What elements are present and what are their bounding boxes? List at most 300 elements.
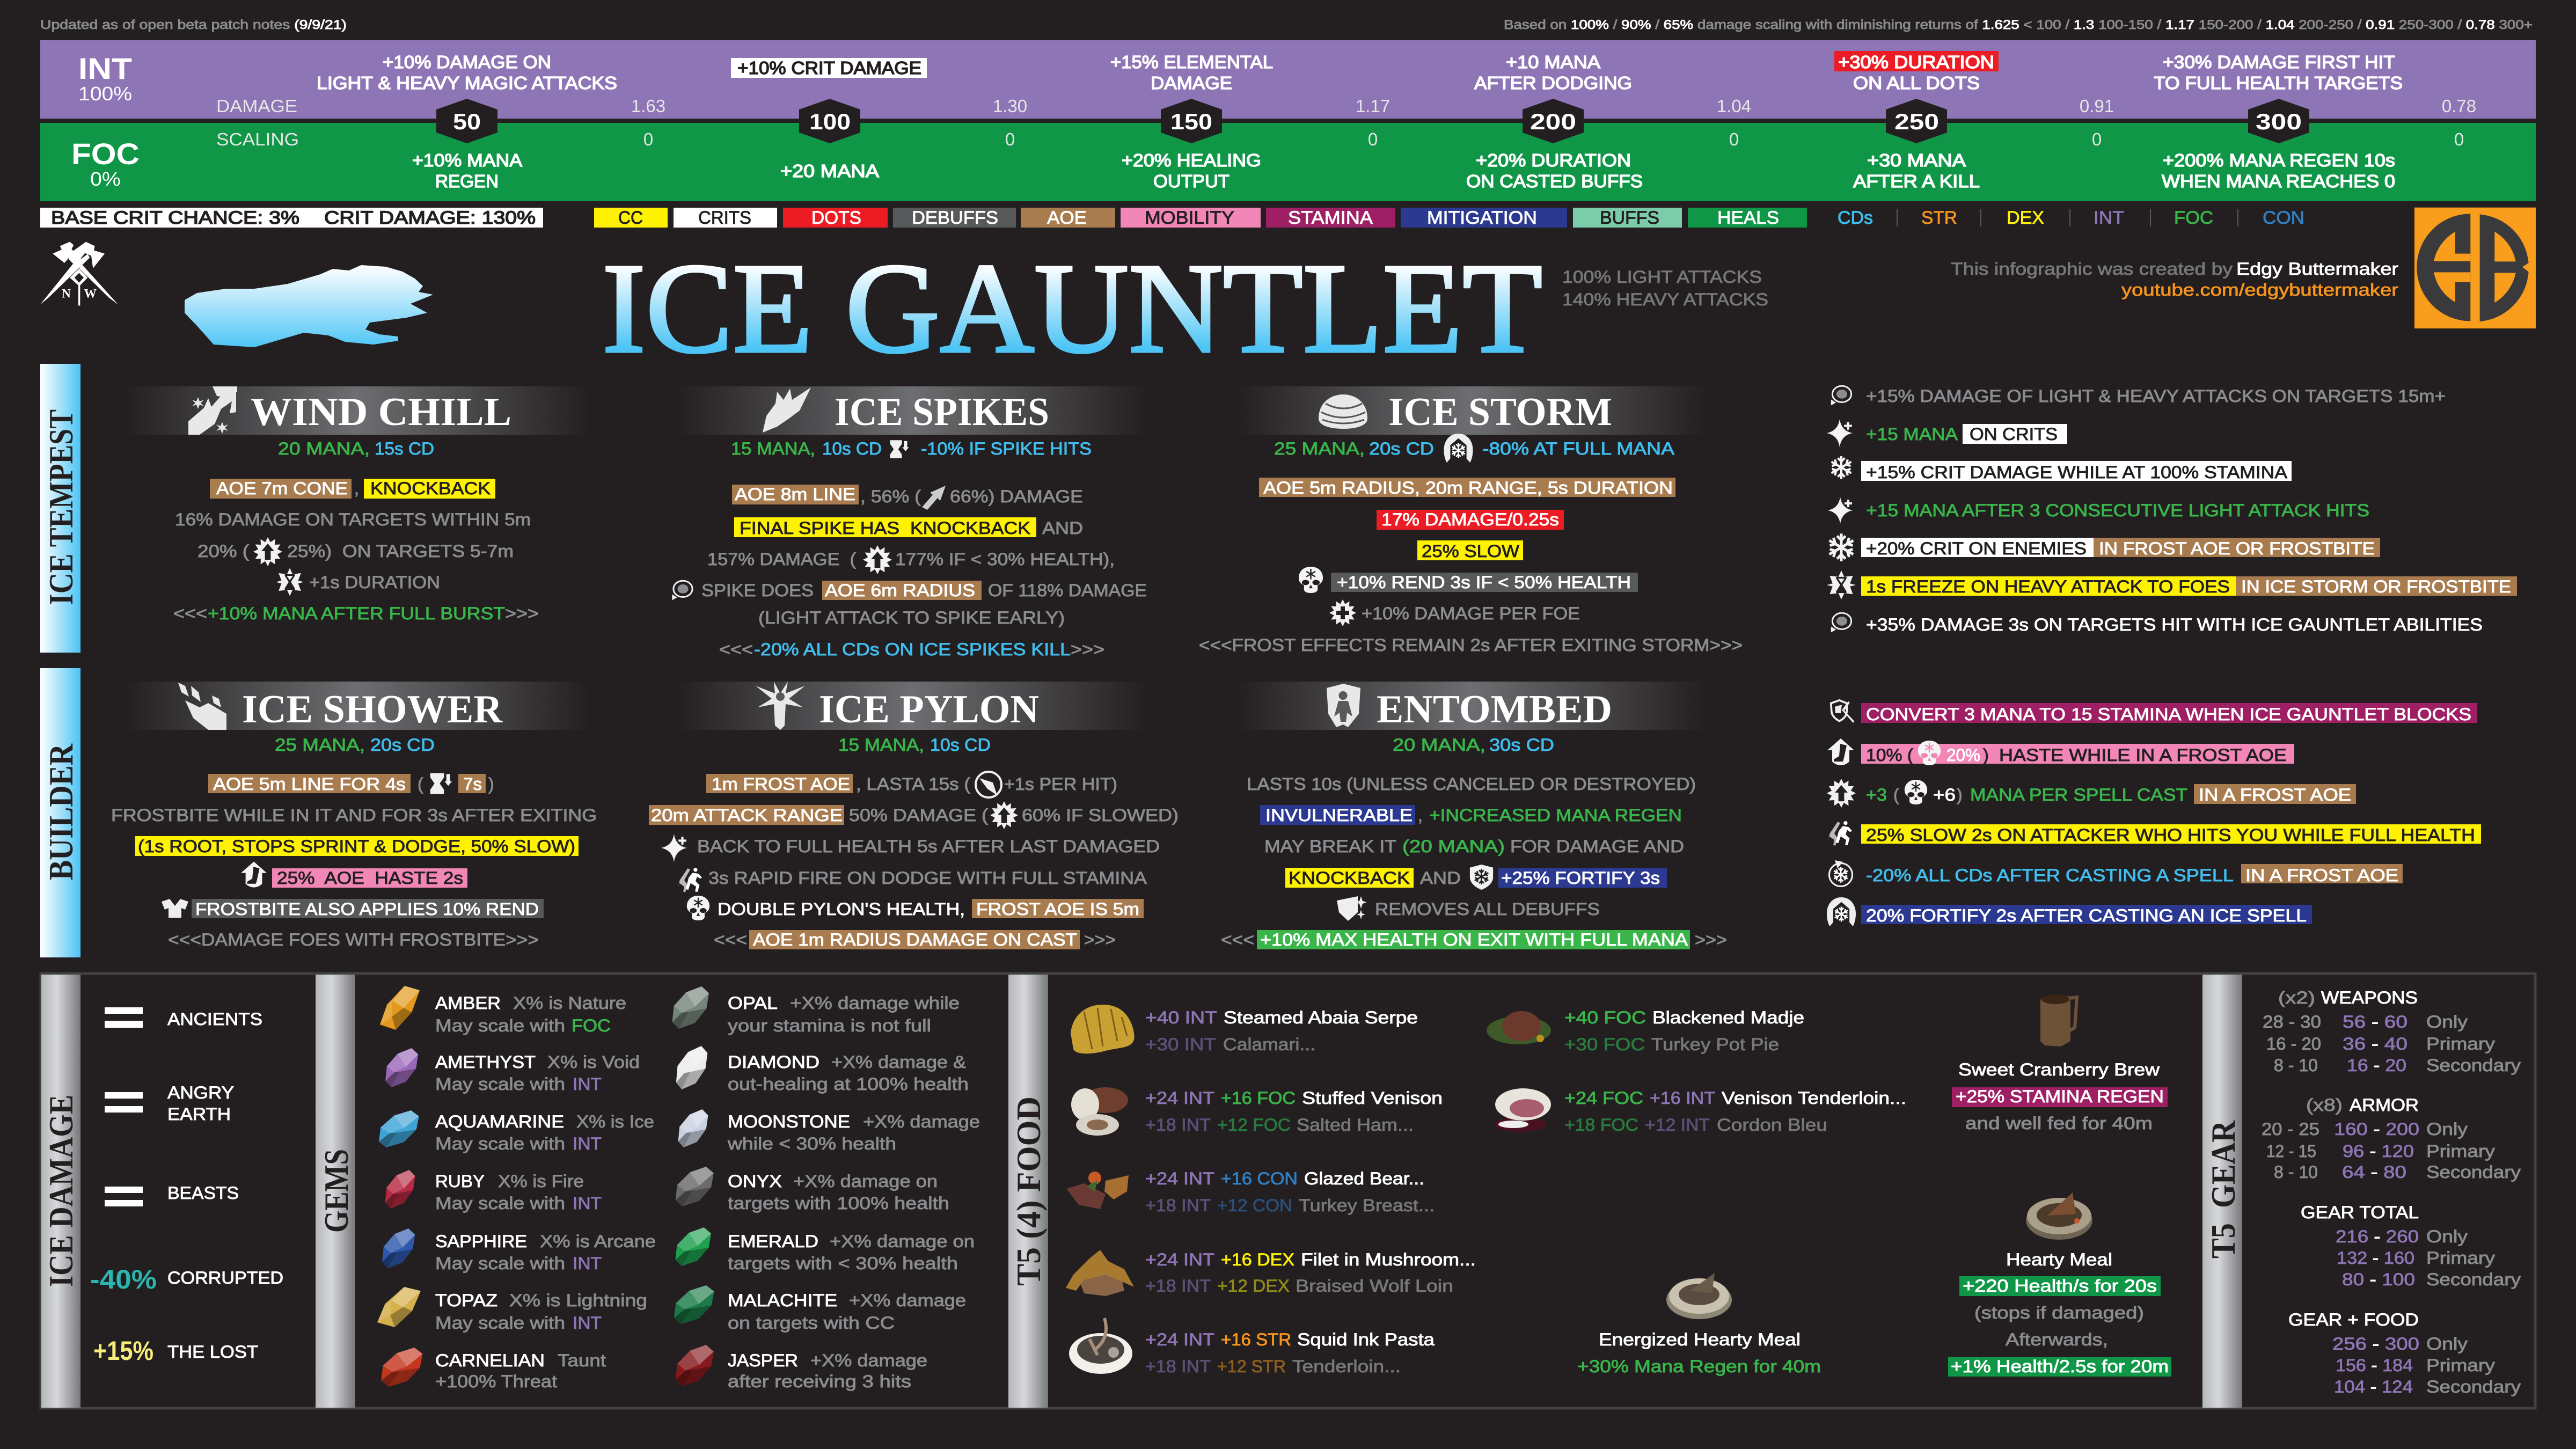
gem: emerald: targets with < 30% health <box>728 1254 958 1273</box>
effect: aoe and knockback: AOE 7m CONE <box>216 479 348 498</box>
effect: double health: FROST AOE IS 5m <box>976 899 1139 919</box>
legend: buffs <box>1573 208 1682 228</box>
effect: spike aoe: AOE 6m RADIUS <box>825 581 975 600</box>
effect: aoe line: 66%) DAMAGE <box>950 487 1083 506</box>
gem: amethyst <box>385 1048 640 1094</box>
gem: ruby: X% is Fire <box>498 1172 584 1191</box>
food: glazed bear: +24 INT <box>1145 1169 1214 1188</box>
cost: -10% IF SPIKE HITS <box>921 439 1092 458</box>
legend: attribute colours: CDs <box>1838 208 1873 228</box>
food: filet in mushroom: Braised Wolf Loin <box>1296 1276 1453 1296</box>
effect: dot: 17% DAMAGE/0.25s <box>1381 510 1559 529</box>
effect: break: FOR DAMAGE AND <box>1510 837 1684 856</box>
FOC label: 0% <box>90 168 121 190</box>
effect: aoe <box>208 773 494 794</box>
separator strip <box>40 119 2536 123</box>
base crit chip: CRIT DAMAGE: 130% <box>324 208 536 228</box>
gear: weapons: 16 - 20 <box>2266 1034 2321 1053</box>
effect: far damage: 25%) ON TARGETS 5-7m <box>287 541 514 561</box>
effect: slow: 25% SLOW <box>1422 541 1520 561</box>
row: corrupted: CORRUPTED <box>167 1268 283 1287</box>
passive: crit damage <box>1832 456 2292 482</box>
passive: damage after abilities: +35% DAMAGE 3s ON TARGETS HIT WITH ICE GAUNTLET ABILITIES <box>1866 615 2483 634</box>
food: glazed bear: +18 INT <box>1145 1196 1211 1215</box>
food: venison tenderloin: +18 FOC <box>1564 1115 1638 1135</box>
gem: aquamarine: INT <box>573 1134 602 1153</box>
gear: armor: Secondary <box>2426 1162 2521 1182</box>
damage scaling labels: DAMAGE <box>216 96 297 116</box>
effect: knockback and fortify <box>1285 865 1667 890</box>
gear: gear plus food <box>2288 1310 2521 1396</box>
passive: fortify <box>1827 897 2312 926</box>
icon: ice shower <box>178 683 226 730</box>
food: filet in mushroom: +12 DEX <box>1217 1276 1290 1296</box>
effect: haste <box>241 862 467 888</box>
gem: emerald: +X% damage on <box>830 1232 975 1251</box>
panel: ice damage <box>41 975 283 1408</box>
effect: damage per foe: +10% DAMAGE PER FOE <box>1362 604 1580 623</box>
effect: knockback and fortify: KNOCKBACK <box>1289 868 1410 888</box>
side tab: builder: BUILDER <box>42 743 80 880</box>
gear: gear plus food: GEAR + FOOD <box>2288 1310 2419 1329</box>
heading: entombed <box>1235 682 1707 731</box>
ultimate line: >>> <box>1084 930 1116 949</box>
side tab: ice damage <box>41 975 80 1408</box>
effect: invulnerable <box>1260 805 1682 825</box>
effect: aoe: AOE 5m LINE FOR 4s <box>213 774 406 794</box>
food: hearty meal: Afterwards, <box>2006 1330 2108 1349</box>
panel: ice pylon <box>649 682 1179 949</box>
gem: amber: AMBER <box>435 993 501 1013</box>
ultimate line: <<<FROST EFFECTS REMAIN 2s AFTER EXITING STORM>>> <box>1199 635 1743 655</box>
gear: gear plus food: Primary <box>2426 1356 2495 1375</box>
gear: armor: 8 - 10 <box>2274 1162 2318 1182</box>
effect: knockback and fortify: AND <box>1420 868 1461 888</box>
passive: crit in frost <box>1829 533 2380 561</box>
gear: total: GEAR TOTAL <box>2301 1203 2419 1222</box>
effect: frost aoe <box>706 772 1117 797</box>
cost: 20s CD <box>1369 439 1434 458</box>
legend: attribute colours: STR <box>1921 208 1957 228</box>
FOC bonus 50 <box>412 150 522 191</box>
gear: gear plus food: 156 - 184 <box>2336 1356 2413 1375</box>
passive: ranged damage: +15% DAMAGE OF LIGHT & HEAVY ATTACKS ON TARGETS 15m+ <box>1866 386 2446 406</box>
INT bonus 150: DAMAGE <box>1151 73 1232 93</box>
passive: haste in frost: 20% <box>1946 745 1980 765</box>
panel: bottom reference frame <box>41 974 2535 1408</box>
icon: ice gauntlet silhouette <box>185 265 433 347</box>
gear: total <box>2301 1203 2521 1289</box>
cost <box>838 735 991 755</box>
milestone 50 <box>436 99 497 143</box>
row: the lost <box>93 1336 258 1366</box>
gem: topaz: May scale with <box>435 1313 565 1333</box>
panel: attribute scaling bands <box>40 40 2536 201</box>
passive: freeze <box>1827 570 2517 599</box>
effect: low health damage <box>707 545 1115 574</box>
row: angry earth <box>105 1083 234 1124</box>
passive: mana per spell: ) <box>1957 785 1963 804</box>
food: squid ink pasta: +24 INT <box>1145 1330 1214 1349</box>
gem: amber: May scale with <box>435 1016 565 1035</box>
gem: sapphire: SAPPHIRE <box>435 1232 527 1251</box>
effect: break: (20 MANA) <box>1402 837 1505 856</box>
title: ICE GAUNTLET <box>602 237 1542 379</box>
damage scaling numbers: 0 <box>1368 129 1378 149</box>
row: ancients <box>105 1007 262 1029</box>
effect: health regen: BACK TO FULL HEALTH 5s AFTER LAST DAMAGED <box>697 837 1160 856</box>
food: stuffed venison: +16 FOC <box>1221 1088 1296 1108</box>
row: angry earth: ANGRY <box>167 1083 234 1102</box>
ultimate line: <<< <box>1221 930 1254 949</box>
heading: ice storm: ICE STORM <box>1388 390 1612 434</box>
effect: aoe: AOE 5m RADIUS, 20m RANGE, 5s DURATION <box>1263 478 1673 497</box>
panel: wind chill <box>123 386 591 623</box>
milestone 200 <box>1523 99 1584 143</box>
side tab: gems: GEMS <box>317 1149 355 1233</box>
FOC bonus 200 <box>1466 150 1643 191</box>
gem: carnelian: CARNELIAN <box>435 1351 545 1370</box>
effect: removes debuffs: REMOVES ALL DEBUFFS <box>1375 899 1600 919</box>
cost: -80% AT FULL MANA <box>1482 439 1675 458</box>
gem: sapphire: May scale with <box>435 1254 565 1273</box>
gem: malachite: MALACHITE <box>728 1291 837 1310</box>
effect: aoe and knockback: , <box>354 479 359 498</box>
effect: final spike: AND <box>1042 518 1083 538</box>
food: hearty meal: Hearty Meal <box>2006 1250 2112 1269</box>
food: energized hearty meal: +30% Mana Regen for 40m <box>1577 1357 1821 1376</box>
damage scaling numbers: 1.63 <box>631 96 665 116</box>
food: filet in mushroom <box>1066 1250 1476 1296</box>
passive: haste in frost: 10% ( <box>1866 745 1913 765</box>
food: hearty meal: +220 Health/s for 20s <box>1963 1276 2157 1296</box>
milestone 250: 250 <box>1894 109 1939 134</box>
cost: 20 MANA, <box>278 439 370 458</box>
row: ancients: ANCIENTS <box>167 1009 262 1029</box>
cost <box>275 735 435 755</box>
effect: health regen <box>661 834 1160 862</box>
gem: diamond: out-healing at 100% health <box>728 1074 969 1094</box>
milestone 200: 200 <box>1530 109 1576 134</box>
panel: builder passives <box>1827 700 2481 926</box>
icon: wind chill <box>188 386 237 435</box>
passive: haste in frost <box>1827 738 2294 765</box>
passive: cooldown reduction <box>1829 860 2403 887</box>
food: stuffed venison <box>1071 1087 1443 1136</box>
food: sweet cranberry brew: +25% STAMINA REGEN <box>1956 1087 2164 1106</box>
panel: ice storm <box>1199 386 1743 655</box>
heading: wind chill: WIND CHILL <box>251 390 511 434</box>
effect: attack range: 50% DAMAGE ( <box>849 806 988 825</box>
gem: amber <box>380 986 626 1035</box>
INT bonus 300 <box>2154 52 2403 93</box>
gem: onyx: targets with 100% health <box>728 1194 949 1213</box>
INT bonus 250: ON ALL DOTS <box>1853 73 1980 93</box>
gem: topaz: X% is Lightning <box>509 1291 647 1310</box>
effect: aoe: ( <box>418 774 423 794</box>
damage scaling numbers: 0 <box>2092 129 2102 149</box>
food: venison tenderloin: +12 INT <box>1645 1115 1710 1135</box>
icon: ice spikes <box>763 387 811 433</box>
food: squid ink pasta <box>1069 1318 1435 1376</box>
effect: spike aoe: OF 118% DAMAGE <box>988 581 1147 600</box>
heading: ice shower <box>123 682 591 731</box>
passive: mana on crit: ON CRITS <box>1970 425 2058 444</box>
food: venison tenderloin: Cordon Bleu <box>1717 1115 1827 1135</box>
INT bonus 250 <box>1834 51 1999 93</box>
legend: attribute colours: FOC <box>2174 208 2213 228</box>
INT bonus 200: +10 MANA <box>1506 52 1600 72</box>
base crit chip: BASE CRIT CHANCE: 3% <box>51 208 299 228</box>
icon: New World logo: N <box>62 287 71 301</box>
food: filet in mushroom: +18 INT <box>1145 1276 1211 1296</box>
gear: weapons: Secondary <box>2426 1056 2521 1075</box>
side tab: builder <box>40 668 80 957</box>
icon: entombed <box>1327 684 1360 727</box>
effect: duration: +1s DURATION <box>309 573 440 592</box>
legend: attribute colours: DEX <box>2007 208 2044 228</box>
legend: buffs: BUFFS <box>1600 208 1659 228</box>
FOC bonus 300: WHEN MANA REACHES 0 <box>2162 171 2395 191</box>
INT bonus 100: +10% CRIT DAMAGE <box>737 58 921 78</box>
food: filet in mushroom: +16 DEX <box>1221 1250 1294 1269</box>
damage scaling numbers: 0.78 <box>2442 96 2476 116</box>
legend: mitigation <box>1401 208 1567 228</box>
passive: freeze: 1s FREEZE ON HEAVY ATTACK TO FOES <box>1866 577 2230 596</box>
INT bonus 150: +15% ELEMENTAL <box>1110 52 1273 72</box>
attack multipliers <box>1562 267 1768 309</box>
creator credit <box>1951 259 2398 299</box>
FOC bonus 200: ON CASTED BUFFS <box>1466 171 1643 191</box>
FOC label <box>71 137 140 190</box>
gem: ruby <box>385 1170 602 1213</box>
INT label <box>78 52 132 105</box>
gem: topaz: TOPAZ <box>435 1291 497 1310</box>
FOC bonus 200: +20% DURATION <box>1476 150 1631 170</box>
legend: stamina <box>1266 208 1395 228</box>
effect: spike aoe: SPIKE DOES <box>701 581 814 600</box>
gem: diamond: DIAMOND <box>728 1052 819 1072</box>
ultimate line: >>> <box>1071 640 1104 659</box>
cost <box>1393 735 1554 755</box>
passive: haste in frost: HASTE WHILE IN A FROST AOE <box>1999 745 2287 765</box>
food: steamed abaia serpe: Steamed Abaia Serpe <box>1224 1008 1418 1027</box>
gem: topaz: INT <box>573 1313 602 1333</box>
INT label: INT <box>78 52 132 85</box>
food: steamed abaia serpe: +30 INT <box>1145 1035 1216 1054</box>
passive: fortify: 20% FORTIFY 2s AFTER CASTING AN ICE SPELL <box>1866 906 2307 925</box>
heading: entombed: ENTOMBED <box>1377 687 1612 731</box>
cost: 25 MANA, <box>1274 439 1365 458</box>
ultimate line: >>> <box>1695 930 1727 949</box>
side tab: gear: T5 GEAR <box>2204 1120 2242 1258</box>
effect: low health damage: 177% IF < 30% HEALTH), <box>895 550 1115 569</box>
effect: break: MAY BREAK IT <box>1264 837 1396 856</box>
FOC bonus 300: +200% MANA REGEN 10s <box>2163 150 2395 170</box>
cost: 15 MANA, <box>838 735 924 755</box>
effect: rend <box>1299 567 1638 593</box>
FOC bonus 250 <box>1853 150 1980 191</box>
FOC bonus 100: +20 MANA <box>780 161 879 181</box>
food: venison tenderloin: Venison Tenderloin... <box>1722 1088 1906 1108</box>
milestone 150: 150 <box>1170 109 1212 134</box>
legend: debuffs: DEBUFFS <box>912 208 998 228</box>
gem: amber: X% is Nature <box>513 993 626 1013</box>
effect: invulnerable: , <box>1418 806 1423 825</box>
gem: amber: FOC <box>572 1016 611 1035</box>
passive: mana per spell: IN A FROST AOE <box>2199 785 2351 804</box>
row: the lost: +15% <box>93 1336 153 1366</box>
food: glazed bear <box>1066 1169 1435 1215</box>
effect: aoe line: AOE 8m LINE <box>735 485 855 504</box>
effect: removes debuffs <box>1337 896 1600 921</box>
gem: onyx: +X% damage on <box>793 1172 938 1191</box>
heading: ice spikes <box>676 386 1148 435</box>
legend: mitigation: MITIGATION <box>1427 208 1537 228</box>
heading: ice shower: ICE SHOWER <box>242 687 503 731</box>
icon: New World logo: W <box>84 287 97 301</box>
update note: Updated as of open beta patch notes (9/9/21) <box>40 18 347 32</box>
gem: opal: your stamina is not full <box>728 1016 931 1035</box>
food: stuffed venison: Stuffed Venison <box>1302 1088 1443 1108</box>
INT bonus 250: +30% DURATION <box>1838 52 1994 72</box>
gear: weapons: Primary <box>2426 1034 2495 1053</box>
milestone 150 <box>1161 99 1222 143</box>
effect: double health <box>687 896 1144 920</box>
effect: rend: +10% REND 3s IF < 50% HEALTH <box>1337 573 1631 592</box>
cost: 15 MANA, <box>731 439 815 458</box>
icon: ice pylon <box>756 682 805 730</box>
icon: EB logo <box>2414 208 2536 328</box>
gem: amethyst: X% is Void <box>547 1052 640 1072</box>
passive: haste in frost: ) <box>1983 745 1989 765</box>
food: hearty meal: +1% Health/2.5s for 20m <box>1951 1357 2169 1376</box>
legend: mobility <box>1121 208 1261 228</box>
gem: aquamarine: May scale with <box>435 1134 565 1153</box>
gear: weapons: 8 - 10 <box>2274 1056 2318 1075</box>
gem: emerald <box>675 1227 975 1273</box>
passive: crit in frost: +20% CRIT ON ENEMIES <box>1866 539 2087 558</box>
heading: ice pylon <box>676 682 1148 731</box>
effect: duration: LASTS 10s (UNLESS CANCELED OR DESTROYED) <box>1247 774 1696 794</box>
gem: jasper: JASPER <box>728 1351 798 1370</box>
legend: aoe <box>1021 208 1115 228</box>
panel: gems <box>316 975 980 1408</box>
FOC bonus 50: REGEN <box>435 171 499 191</box>
gear: gear plus food: 104 - 124 <box>2334 1377 2413 1396</box>
panel: entombed <box>1221 682 1727 949</box>
gem: sapphire <box>382 1228 656 1273</box>
heading: wind chill <box>123 386 591 435</box>
panel: ice tempest passives <box>1827 386 2517 634</box>
passive: mana after light attacks <box>1828 497 2369 524</box>
ultimate line: -20% ALL CDs ON ICE SPIKES KILL <box>754 640 1071 659</box>
milestone 300 <box>2248 99 2309 143</box>
effect: attack range: 20m ATTACK RANGE <box>651 806 843 825</box>
FOC bonus 250: +30 MANA <box>1867 150 1966 170</box>
gem: amethyst: AMETHYST <box>435 1052 536 1072</box>
gear: total: Only <box>2426 1227 2468 1246</box>
food: filet in mushroom: Filet in Mushroom... <box>1301 1250 1476 1269</box>
damage scaling labels: SCALING <box>216 129 299 149</box>
food: stuffed venison: Salted Ham... <box>1297 1115 1414 1135</box>
damage scaling labels <box>216 96 299 149</box>
effect: final spike: FINAL SPIKE HAS KNOCKBACK <box>740 518 1030 538</box>
gear: total: 80 - 100 <box>2342 1270 2415 1289</box>
INT bonus 50: LIGHT & HEAVY MAGIC ATTACKS <box>317 73 617 93</box>
effect: aoe: ) <box>488 774 494 794</box>
gem: amethyst: INT <box>573 1074 602 1094</box>
food: glazed bear: +16 CON <box>1221 1169 1298 1188</box>
effect: far damage <box>197 537 514 566</box>
effect: aoe line: , 56% ( <box>860 487 921 506</box>
FOC bonus 50: +10% MANA <box>412 150 522 170</box>
heading: ice spikes: ICE SPIKES <box>835 390 1049 434</box>
legend: CC: CC <box>618 208 643 228</box>
gear: armor: 160 - 200 <box>2334 1119 2419 1139</box>
icon: New World logo <box>40 242 118 305</box>
gem: carnelian <box>381 1348 606 1391</box>
gem: moonstone: while < 30% health <box>727 1134 896 1153</box>
gem: opal <box>672 986 960 1035</box>
legend: dots <box>783 208 888 228</box>
passive: mana per spell: ( <box>1893 785 1899 804</box>
effect: frost aoe: 1m FROST AOE <box>712 774 850 794</box>
food: venison tenderloin <box>1495 1088 1906 1135</box>
cost: 30s CD <box>1489 735 1554 755</box>
side tab: food: T5 (4) FOOD <box>1009 1096 1048 1286</box>
effect: attack range: 60% IF SLOWED) <box>1022 806 1179 825</box>
food: blackened madje: +40 FOC <box>1564 1008 1646 1027</box>
food: glazed bear: +12 CON <box>1217 1196 1292 1215</box>
panel: gear <box>2202 975 2521 1408</box>
passive: convert mana <box>1831 700 2477 724</box>
food: blackened madje: Turkey Pot Pie <box>1651 1035 1779 1054</box>
legend: crits: CRITS <box>698 208 751 228</box>
food: squid ink pasta: Tenderloin... <box>1292 1357 1401 1376</box>
effect: note: (LIGHT ATTACK TO SPIKE EARLY) <box>758 608 1065 627</box>
INT bonus 200: AFTER DODGING <box>1474 73 1632 93</box>
gem: opal: OPAL <box>728 993 778 1013</box>
gem: jasper: after receiving 3 hits <box>728 1372 911 1391</box>
gear: total: 216 - 260 <box>2336 1227 2419 1246</box>
ultimate line: +10% MANA AFTER FULL BURST <box>208 604 505 623</box>
row: beasts: BEASTS <box>167 1183 239 1203</box>
ultimate line: <<< <box>714 930 747 949</box>
heading: ice storm <box>1235 386 1707 435</box>
milestone 250 <box>1886 99 1947 143</box>
food: blackened madje <box>1487 1008 1804 1054</box>
passive: mana per spell: +6 <box>1933 785 1956 804</box>
passive: crit in frost: IN FROST AOE OR FROSTBITE <box>2099 539 2375 558</box>
milestone 300: 300 <box>2256 109 2302 134</box>
food: stuffed venison: +24 INT <box>1145 1088 1214 1108</box>
side tab: ice tempest: ICE TEMPEST <box>42 409 80 605</box>
passive: slow on attacker: 25% SLOW 2s ON ATTACKER WHO HITS YOU WHILE FULL HEALTH <box>1866 825 2475 845</box>
side tab: gear <box>2202 975 2242 1408</box>
panel: legend row <box>40 208 2304 228</box>
INT bonus 150 <box>1110 52 1273 93</box>
food: hearty meal: (stops if damaged) <box>1974 1303 2144 1322</box>
cost: 10s CD <box>822 439 882 458</box>
damage scaling numbers: 0 <box>1729 129 1739 149</box>
legend: heals <box>1688 208 1807 228</box>
damage scaling numbers <box>631 96 2476 149</box>
cost: 10s CD <box>930 735 991 755</box>
row: beasts <box>105 1183 239 1206</box>
panel: ice spikes <box>672 386 1148 659</box>
food: sweet cranberry brew: and well fed for 40m <box>1965 1114 2153 1133</box>
